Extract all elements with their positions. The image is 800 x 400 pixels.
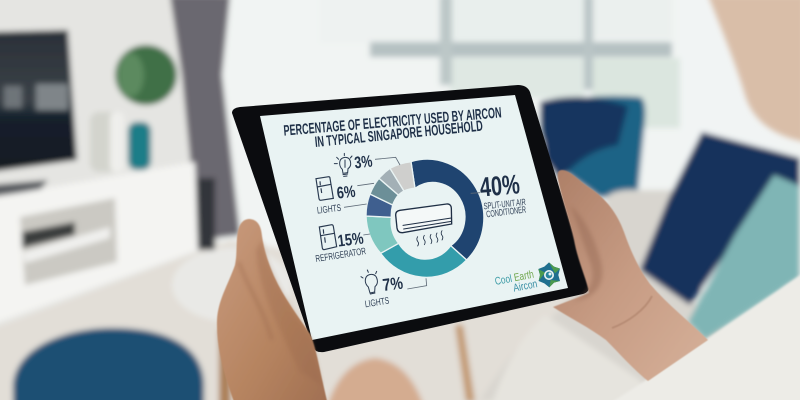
callout: 6% lights: 6% [336,182,356,203]
tablet screen [260,95,568,340]
white shirt sleeve [600,272,800,400]
icon: refrigerator [319,225,337,250]
title: PERCENTAGE OF ELECTRICITY USED BY AIRCON [283,104,502,140]
teal cushion [688,175,800,340]
right hand [553,170,708,381]
icon: refrigerator [316,177,333,200]
vases [90,112,120,172]
window panes [320,0,440,43]
left hand [217,219,328,400]
icon: light bulb [334,153,352,176]
curtain [170,0,240,240]
TV cabinet [0,162,198,325]
icon: swirl emblem [538,262,560,287]
icon: light bulb [361,270,377,294]
title: IN TYPICAL SINGAPORE HOUSEHOLD [314,118,484,151]
logo: Cool Earth Aircon: Aircon [512,278,538,295]
round side table [172,248,292,322]
callout: 6% lights [316,177,374,217]
callout: 3% [334,152,400,176]
callout: 3%: 3% [353,152,373,172]
infographic in screen [283,104,560,310]
callout: 7% lights: LIGHTS [364,296,390,310]
person head [708,0,800,142]
callout: 15% refrigerator [315,225,370,265]
callout: 15% refrigerator: 15% [337,229,365,251]
sofa [480,190,800,400]
callout: 40% split-unit air conditioner [471,168,527,219]
callout: 6% lights: LIGHTS [316,203,342,217]
tablet body [232,85,589,352]
callout: 40% split-unit air conditioner: 40% [478,168,521,203]
donut chart [366,159,484,277]
callout: 7% lights: 7% [381,273,404,295]
logo: Cool Earth Aircon [494,262,560,295]
icon: air conditioner [396,204,452,246]
plant [115,45,177,105]
callout: 7% lights [361,270,427,310]
blue stool [13,328,204,400]
tablet [232,85,589,352]
logo: Cool Earth Aircon: Cool Earth [494,269,535,288]
callout: 40% split-unit air conditioner: CONDITIONER [486,204,527,219]
title [283,104,502,151]
knee [326,358,425,400]
television [0,30,77,172]
callout: 40% split-unit air conditioner: SPLIT-UNIT AIR [483,197,526,211]
navy cushion [640,132,800,305]
callout: 15% refrigerator: REFRIGERATOR [315,246,367,265]
blue armchair [540,96,645,198]
